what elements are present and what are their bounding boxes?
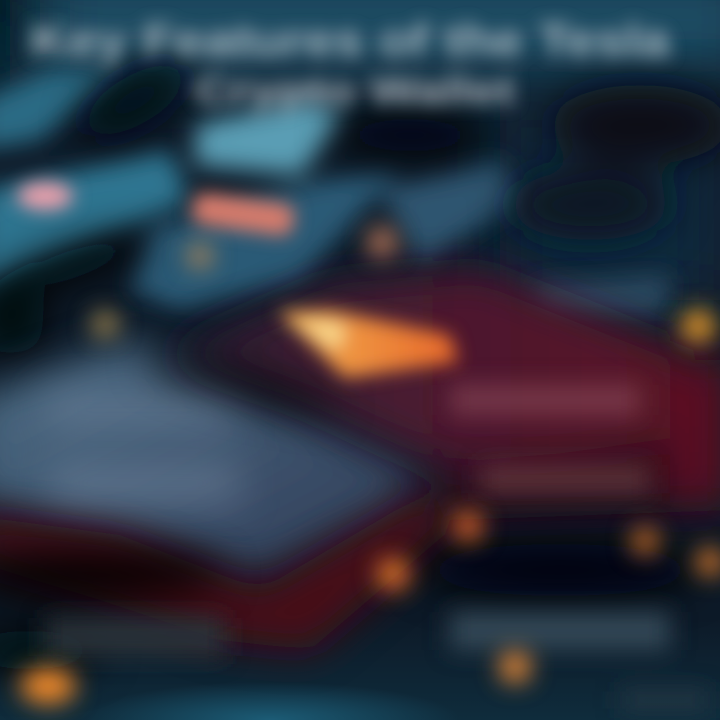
pink labels [17,182,296,237]
icon: flame arrow [278,310,458,378]
title: Crypto Wallet [195,69,515,113]
dark shadows [0,49,720,355]
main blue card [0,340,420,575]
teal upper panels [0,70,670,315]
wine card [0,270,720,650]
glowing dots [20,227,720,704]
card text blocks [45,395,240,501]
dark lower strips [0,352,700,670]
title: Key Features of the Tesla [30,15,671,66]
bottom text blocks [45,612,710,710]
title [30,15,671,113]
wine card text blocks [450,385,650,493]
